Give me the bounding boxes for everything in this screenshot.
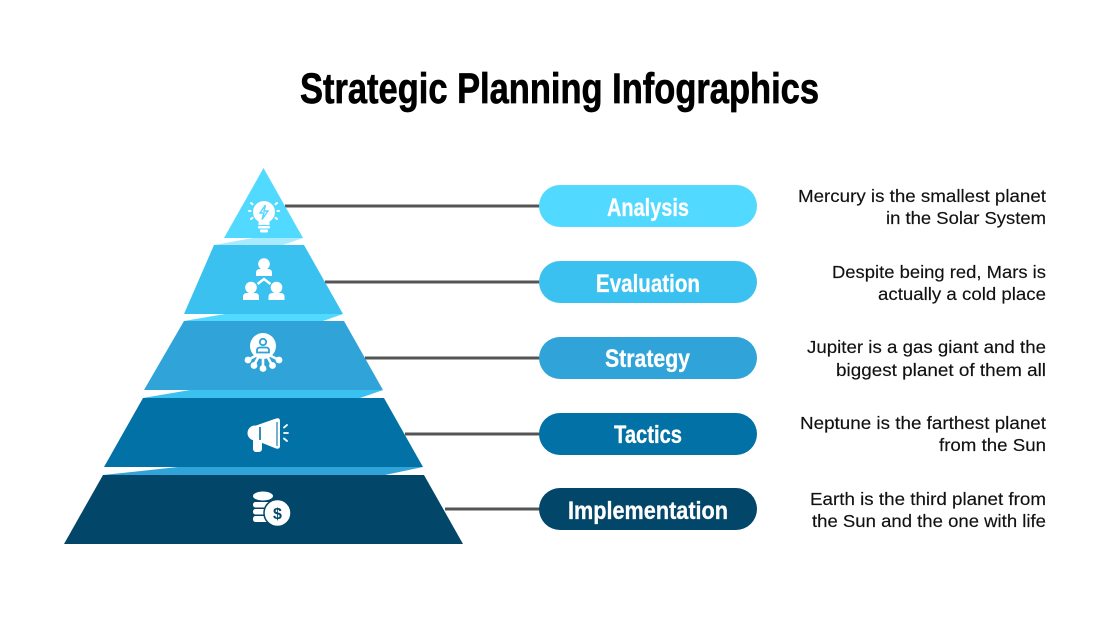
- pill: Evaluation: Evaluation: [596, 270, 700, 298]
- icon: network person: [245, 333, 282, 372]
- pill: Tactics: [539, 413, 757, 455]
- pill: Strategy: Strategy: [605, 345, 690, 373]
- connector: Strategy: [365, 356, 541, 360]
- text: Mars: [832, 262, 1046, 304]
- icon: light bulb: [249, 201, 279, 232]
- text: Neptune: from the Sun: [939, 435, 1046, 455]
- text: Neptune: Neptune is the farthest planet: [800, 413, 1046, 433]
- pill: Analysis: Analysis: [607, 194, 689, 222]
- tier: Tactics: [104, 398, 423, 467]
- icon: team: [243, 258, 284, 300]
- text: Mars: actually a cold place: [878, 284, 1046, 304]
- fold 2: [184, 314, 343, 321]
- text: Earth: [810, 489, 1046, 531]
- connector: Tactics: [405, 432, 541, 436]
- icon: coins: $: [273, 506, 282, 523]
- tier: Implementation: [64, 475, 463, 544]
- text: Jupiter: biggest planet of them all: [836, 360, 1046, 380]
- tier: Evaluation: [184, 245, 343, 314]
- text: Earth: Earth is the third planet from: [810, 489, 1046, 509]
- connector: Evaluation: [325, 280, 541, 284]
- fold 4: [103, 467, 423, 475]
- title: Strategic Planning Infographics: [300, 65, 819, 113]
- text: Mercury: [798, 186, 1046, 228]
- text: Mercury: in the Solar System: [886, 208, 1046, 228]
- tier: Strategy: [144, 321, 383, 390]
- text: Mercury: Mercury is the smallest planet: [798, 186, 1046, 206]
- pill: Implementation: [539, 488, 757, 530]
- icon: coins: [253, 492, 291, 526]
- pyramid: [64, 168, 463, 544]
- text: Jupiter: [807, 337, 1046, 380]
- text: Neptune: [800, 413, 1046, 455]
- text: Jupiter: Jupiter is a gas giant and the: [807, 337, 1046, 357]
- text: Earth: the Sun and the one with life: [812, 511, 1046, 531]
- pill: Implementation: Implementation: [568, 497, 728, 525]
- fold 1: [214, 238, 303, 245]
- connector: Analysis: [285, 204, 541, 208]
- pill: Analysis: [539, 185, 757, 227]
- pill: Tactics: Tactics: [614, 421, 682, 449]
- connector: Implementation: [445, 508, 541, 510]
- fold 3: [143, 390, 383, 398]
- icon: megaphone: [248, 418, 288, 452]
- pill: Evaluation: [539, 261, 757, 303]
- text: Mars: Despite being red, Mars is: [832, 262, 1046, 282]
- pill: Strategy: [539, 337, 757, 379]
- tier: Analysis: [224, 168, 303, 238]
